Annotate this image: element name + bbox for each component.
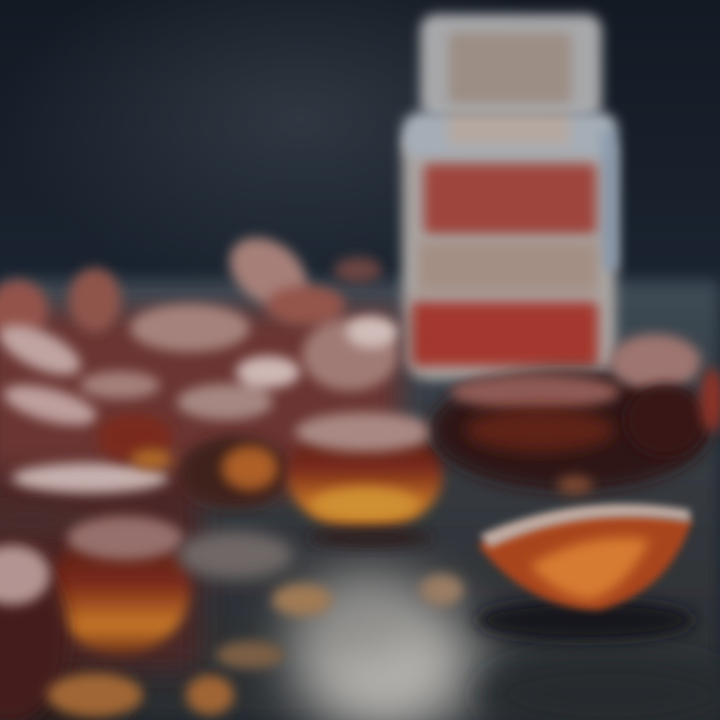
- dark base behind capsules: [0, 310, 400, 670]
- pale disc beside capsules: [177, 531, 293, 579]
- table surface: [0, 280, 720, 720]
- background wall: [0, 0, 720, 300]
- bottle shoulder highlight: [402, 112, 618, 270]
- amber capsule bases: [0, 414, 290, 536]
- pill bottle: [402, 14, 618, 380]
- lower left amber capsule: [50, 516, 190, 654]
- white capsule highlights: [0, 315, 398, 493]
- bottle body: [402, 125, 616, 380]
- far left capsule: [0, 545, 68, 720]
- upper red label band: [424, 164, 596, 234]
- capsule cluster left: [0, 223, 443, 720]
- bottle cap: [420, 14, 602, 119]
- capsule cluster right: [430, 334, 720, 490]
- lower red label band: [412, 302, 598, 366]
- loose granules on table: [47, 476, 593, 717]
- broken capsule lower right: [475, 504, 695, 640]
- middle beige label band: [418, 242, 598, 292]
- central amber capsule: [287, 412, 443, 548]
- rear pink capsules: [0, 223, 398, 391]
